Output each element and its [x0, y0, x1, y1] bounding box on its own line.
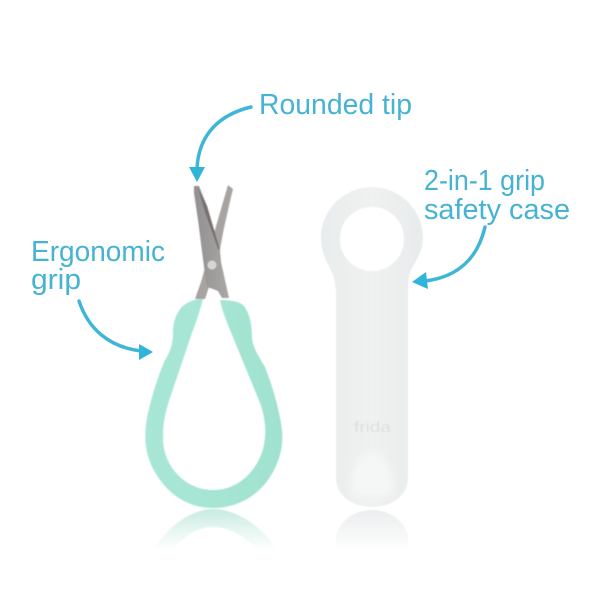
reflection: safety case: [336, 510, 408, 550]
scissors: [145, 185, 282, 508]
arrow: rounded tip: [189, 107, 251, 182]
label: ergonomic grip: grip: [31, 264, 81, 296]
case body with ring: [321, 187, 423, 507]
reflection: scissors handle: [153, 509, 277, 550]
arrow: safety case: [412, 227, 485, 289]
thumb scoop: [351, 452, 393, 496]
case logo: frida: [354, 419, 392, 436]
label: safety case: [424, 165, 570, 226]
label: ergonomic grip: [31, 236, 165, 296]
front blade: [194, 186, 229, 298]
label: ergonomic grip: Ergonomic: [31, 236, 165, 268]
pivot screw: [208, 260, 216, 270]
arrow: ergonomic grip: [79, 301, 153, 360]
back blade: [195, 185, 233, 299]
label: safety case: safety case: [424, 194, 570, 226]
blade bevel: [198, 188, 220, 250]
label: rounded tip: Rounded tip: [259, 89, 412, 121]
safety case: [321, 187, 423, 507]
mint loop handle: [145, 299, 282, 508]
label: safety case: 2-in-1 grip: [424, 165, 545, 197]
